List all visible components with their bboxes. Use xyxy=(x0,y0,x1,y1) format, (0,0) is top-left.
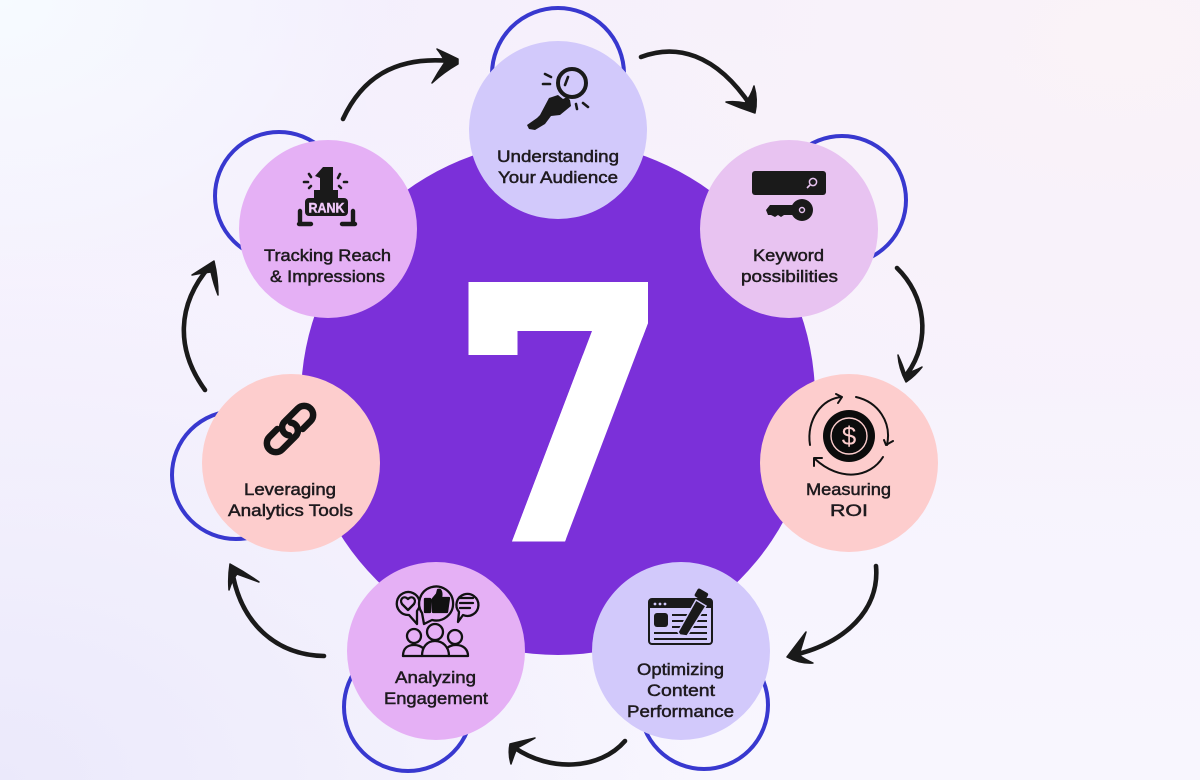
infographic xyxy=(170,6,938,773)
node: Tracking Reach & Impressions: & Impressions xyxy=(270,267,385,286)
node: Understanding Your Audience: Understanding xyxy=(497,147,619,166)
node: Analyzing Engagement: Engagement xyxy=(384,689,488,708)
node: Understanding Your Audience xyxy=(469,41,647,219)
arrow: optimizing to analyzing xyxy=(509,738,625,765)
node: Tracking Reach & Impressions: Tracking Reach xyxy=(264,246,391,265)
arrow: leveraging to tracking xyxy=(184,261,218,390)
node: Leveraging Analytics Tools xyxy=(202,374,380,552)
icon: dollar with cycle arrows xyxy=(809,394,893,475)
blue accent rings xyxy=(172,8,906,771)
central purple circle xyxy=(301,141,815,655)
node: Optimizing Content Performance xyxy=(592,562,770,740)
icon: dollar with cycle arrows: $ xyxy=(842,421,857,451)
node: Measuring ROI: Measuring xyxy=(806,480,891,499)
node: Understanding Your Audience: Your Audience xyxy=(498,168,618,187)
big number 7: 7 xyxy=(458,201,668,623)
node: Measuring ROI: ROI xyxy=(830,501,868,520)
arrow: keyword to ROI xyxy=(897,268,922,382)
icon: rank one badge: RANK xyxy=(308,200,345,216)
node: Leveraging Analytics Tools: Analytics Tools xyxy=(228,501,353,520)
icon: hand with magnifier xyxy=(527,69,588,130)
icon: web page with pencil xyxy=(649,588,712,644)
icon: chain link xyxy=(263,402,317,456)
node: Keyword possibilities: Keyword xyxy=(753,246,824,265)
node: Optimizing Content Performance: Performance xyxy=(627,702,734,721)
node: Keyword possibilities xyxy=(700,140,878,318)
icon: audience with speech bubbles xyxy=(397,587,478,656)
arrow: understanding to keyword xyxy=(641,52,756,113)
node: Keyword possibilities: possibilities xyxy=(741,267,838,286)
arrows xyxy=(184,49,922,765)
icon: rank one badge xyxy=(299,167,355,224)
icon: search bar and key xyxy=(752,171,826,221)
arrow: tracking to understanding xyxy=(343,49,458,119)
node: Analyzing Engagement: Analyzing xyxy=(395,668,476,687)
node: Optimizing Content Performance: Optimizing xyxy=(637,660,724,679)
node: Tracking Reach & Impressions xyxy=(239,140,417,318)
arrow: analyzing to leveraging xyxy=(229,564,324,656)
node: Analyzing Engagement xyxy=(347,562,525,740)
node: Measuring ROI xyxy=(760,374,938,552)
node: Leveraging Analytics Tools: Leveraging xyxy=(244,480,336,499)
big number 7 xyxy=(468,282,648,542)
node: Optimizing Content Performance: Content xyxy=(647,681,715,700)
arrow: ROI to optimizing xyxy=(787,566,876,663)
